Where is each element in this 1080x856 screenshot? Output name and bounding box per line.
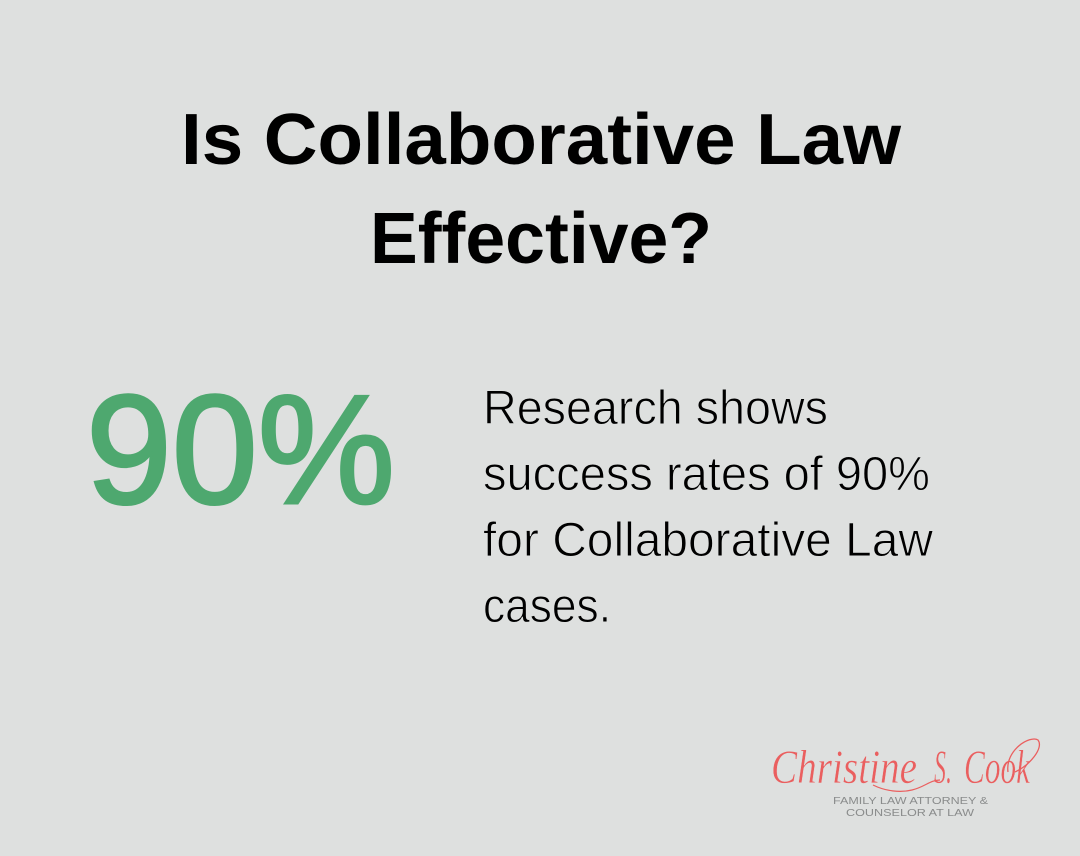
title: Is Collaborative Law <box>181 100 902 180</box>
description text: cases. <box>483 580 611 633</box>
logo: Christine S. Cook: S. <box>934 741 952 794</box>
description text <box>483 382 933 633</box>
description text: success rates of 90% <box>483 448 930 501</box>
title: Effective? <box>370 199 712 279</box>
description text: Research shows <box>483 382 828 435</box>
big statistic: 90%: 90% <box>86 363 395 536</box>
logo: Christine S. Cook: Christine <box>771 741 917 794</box>
title <box>181 100 902 279</box>
logo: Christine S. Cook: COUNSELOR AT LAW <box>846 807 974 819</box>
description text: for Collaborative Law <box>483 514 933 567</box>
logo: Christine S. Cook <box>771 739 1039 819</box>
logo: Christine S. Cook: Cook <box>964 741 1031 794</box>
logo: Christine S. Cook: FAMILY LAW ATTORNEY & <box>833 795 988 807</box>
